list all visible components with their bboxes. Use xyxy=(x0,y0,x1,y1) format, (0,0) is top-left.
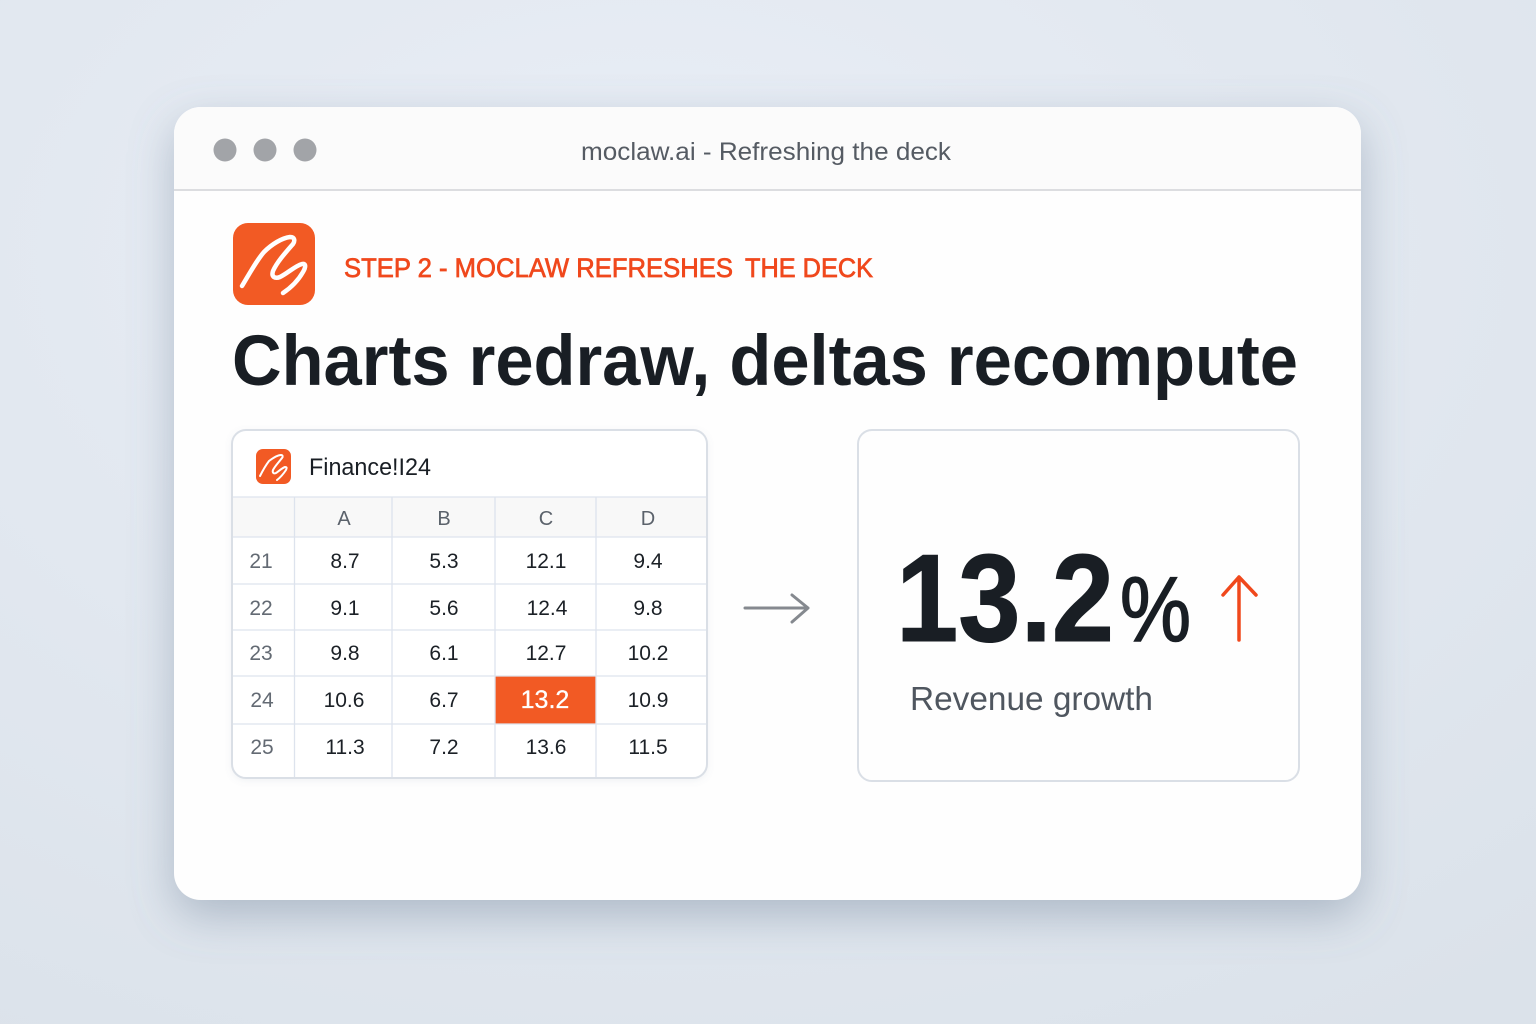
row 21: 8.7 xyxy=(330,550,360,573)
column headers: C xyxy=(539,508,553,530)
row 22: 9.8 xyxy=(633,597,663,620)
step label: THE DECK xyxy=(745,253,873,283)
row 23 xyxy=(249,642,668,665)
row 22 xyxy=(249,597,663,620)
browser title bar xyxy=(174,107,1361,190)
icon: small moclaw logo xyxy=(256,449,291,484)
row 21: 21 xyxy=(249,550,273,573)
column headers xyxy=(337,508,655,530)
icon: moclaw logo xyxy=(233,223,315,305)
row 24: 24 xyxy=(250,689,274,712)
row 23: 12.7 xyxy=(526,642,566,665)
row 24: 10.9 xyxy=(628,689,668,712)
row 21 xyxy=(249,550,663,573)
spreadsheet reference: Finance!I24 xyxy=(309,454,431,481)
row 24 xyxy=(250,686,668,714)
arrow: spreadsheet to metric xyxy=(745,595,808,622)
panel: metric card xyxy=(858,430,1299,781)
row 25 xyxy=(250,736,668,759)
highlighted cell xyxy=(495,676,596,724)
row 22: 22 xyxy=(249,597,273,620)
row 25: 13.6 xyxy=(526,736,566,759)
panel: browser window xyxy=(174,107,1361,900)
column headers: D xyxy=(641,508,655,530)
metric value: 13.2 xyxy=(896,530,1114,668)
row 25: 7.2 xyxy=(429,736,459,759)
row 23: 6.1 xyxy=(429,642,459,665)
step label: STEP 2 - MOCLAW REFRESHES xyxy=(344,253,733,283)
panel: spreadsheet xyxy=(232,430,707,778)
metric value: % xyxy=(1120,559,1191,661)
row 21: 9.4 xyxy=(633,550,663,573)
row 23: 10.2 xyxy=(628,642,668,665)
row 24: 13.2 xyxy=(521,686,569,714)
row 25: 25 xyxy=(250,736,274,759)
column headers: A xyxy=(337,508,351,530)
row 21: 12.1 xyxy=(526,550,566,573)
browser title bar: moclaw.ai - Refreshing the deck xyxy=(581,138,952,166)
row 23: 9.8 xyxy=(330,642,360,665)
title: Charts redraw, deltas recompute xyxy=(232,322,1298,401)
row 21: 5.3 xyxy=(429,550,459,573)
row 22: 12.4 xyxy=(527,597,568,620)
column headers: B xyxy=(437,508,451,530)
row 23: 23 xyxy=(249,642,273,665)
row 22: 9.1 xyxy=(330,597,360,620)
icon: up arrow xyxy=(1223,577,1256,640)
metric label: Revenue growth xyxy=(910,680,1153,717)
row 22: 5.6 xyxy=(429,597,459,620)
row 24: 6.7 xyxy=(429,689,459,712)
row 25: 11.3 xyxy=(325,736,365,759)
row 24: 10.6 xyxy=(324,689,364,712)
row 25: 11.5 xyxy=(628,736,668,759)
